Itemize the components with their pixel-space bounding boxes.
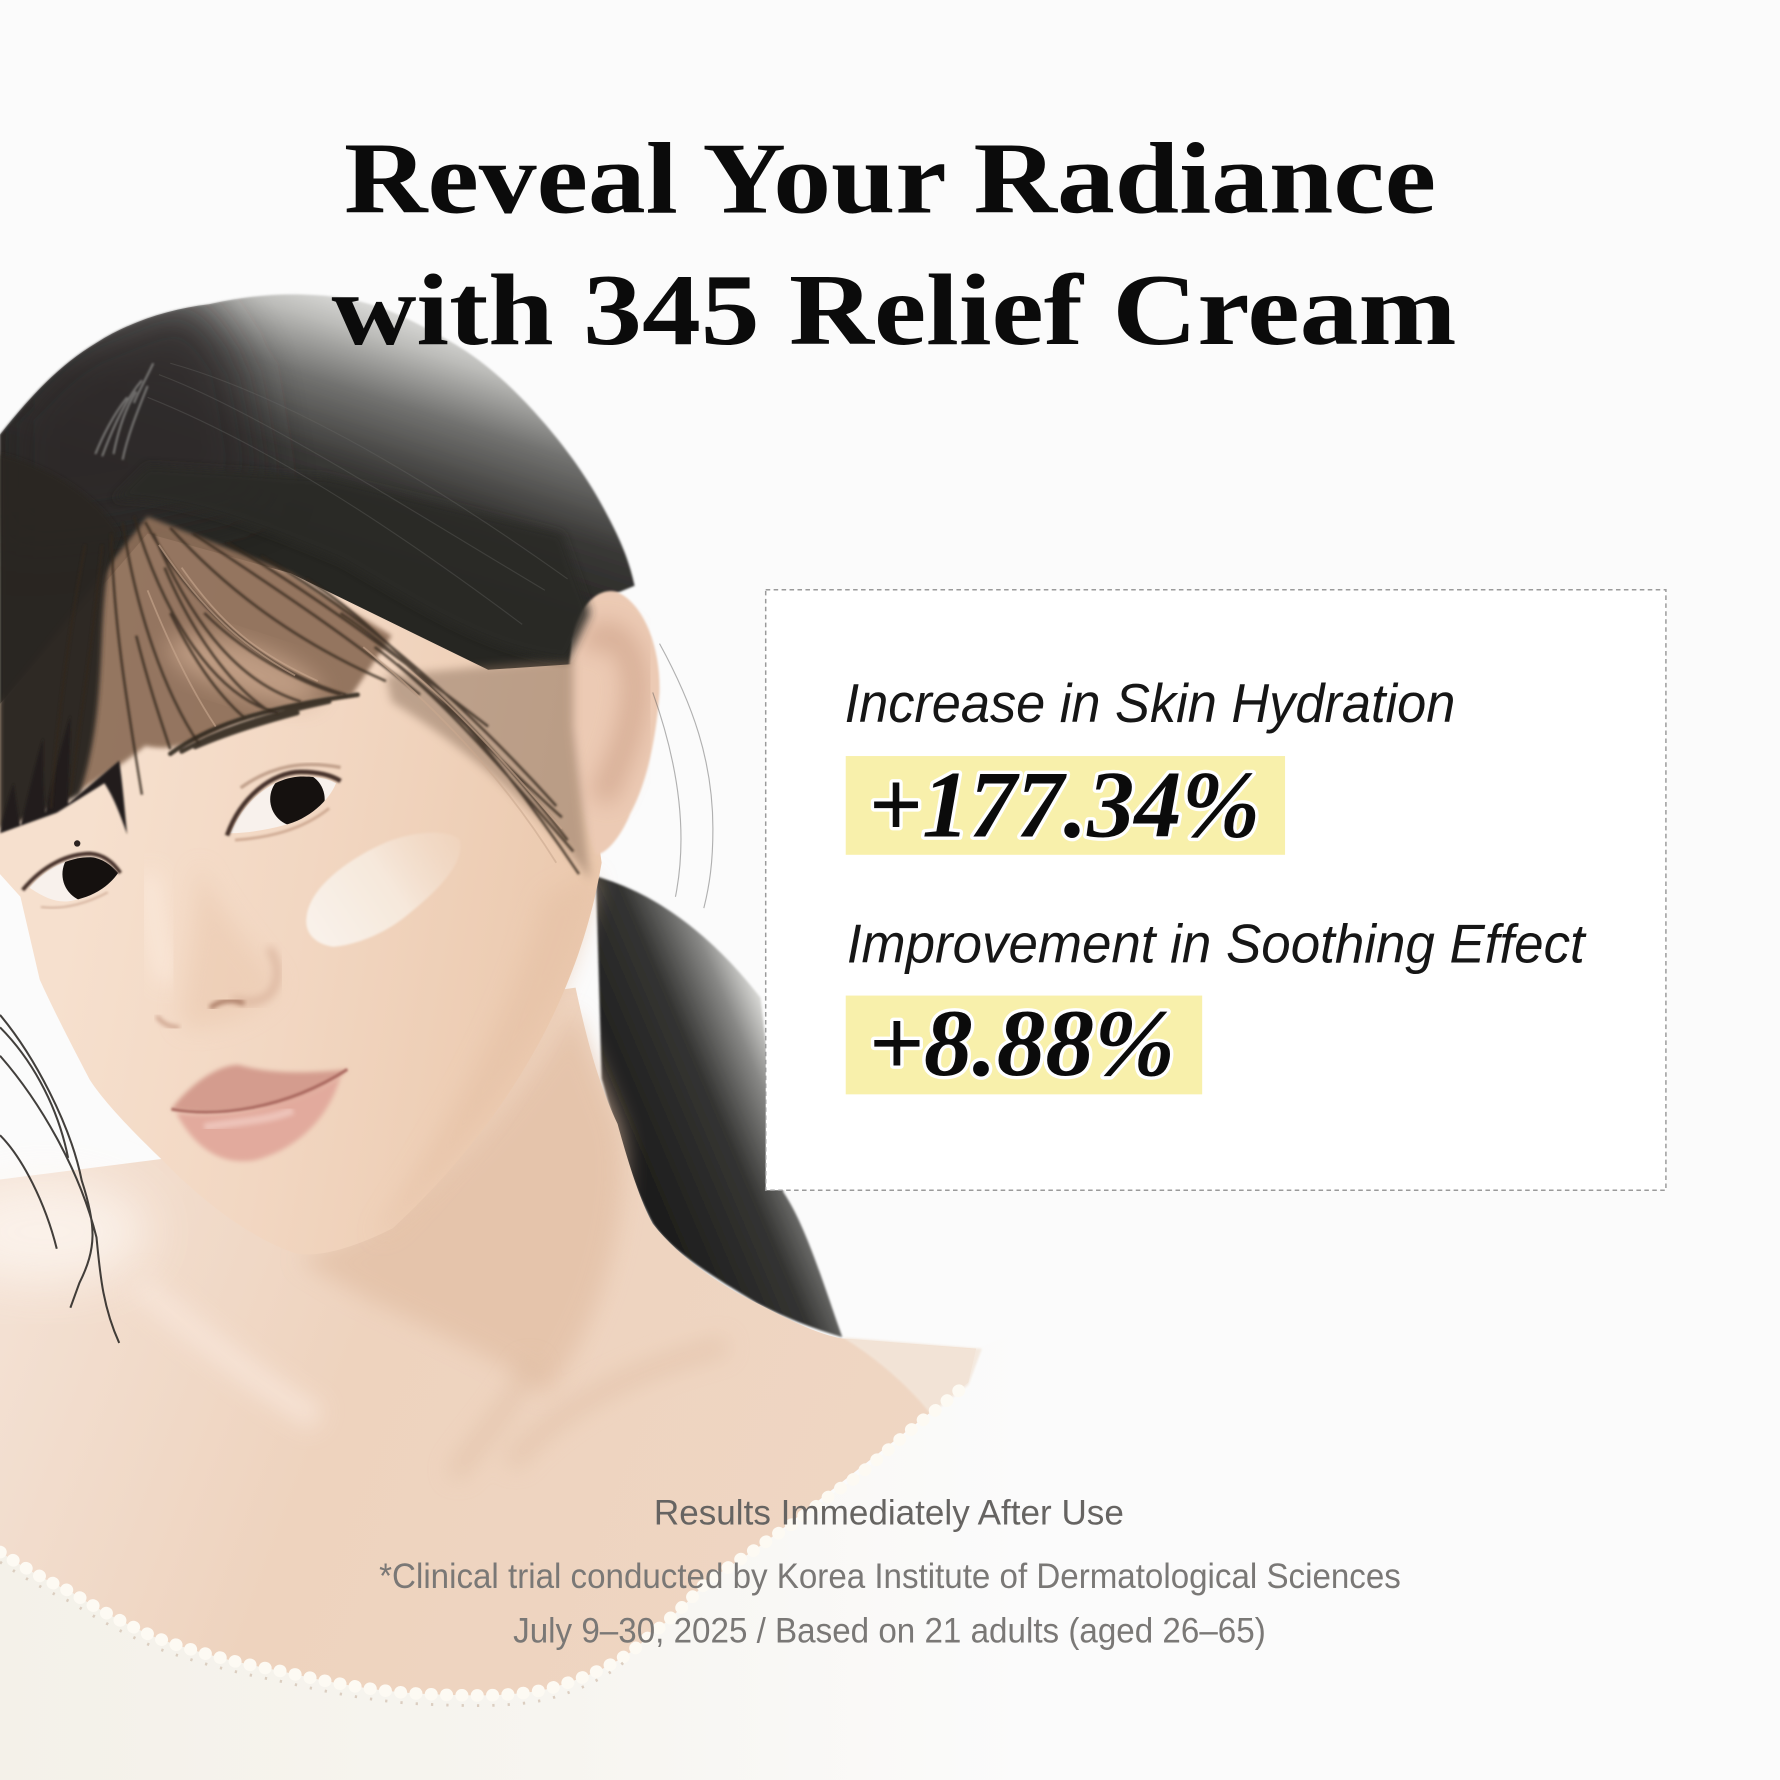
ponytail: [596, 876, 842, 1337]
highlight value: +8.88%: +8.88%: [868, 990, 1175, 1096]
inner ear shading: [588, 635, 636, 800]
crown part whorl: [95, 363, 153, 460]
portrait photo illustration: [0, 294, 982, 1780]
panel: clinical results: [766, 590, 1666, 1190]
scalloped neckline: [0, 1383, 968, 1695]
fringe side wisps: [386, 658, 590, 880]
label: skin hydration: Increase in Skin Hydration: [845, 673, 1455, 734]
back hair and crown: [0, 294, 635, 863]
flyaway strands right: [653, 644, 713, 908]
loose hair strands: [0, 1015, 119, 1343]
lips: [171, 1065, 347, 1161]
footnote text: July 9–30, 2025 / Based on 21 adults (aged 26–65): [513, 1612, 1266, 1651]
title: Reveal Your Radiance: [344, 122, 1436, 235]
collarbone highlight: [136, 1283, 318, 1419]
light fine strands: [148, 545, 562, 863]
dark fine strands: [51, 517, 579, 874]
white top garment: [0, 1283, 1135, 1780]
shoulder light patch: [0, 1181, 148, 1283]
fringe edge strands: [170, 695, 358, 754]
face: [0, 534, 602, 1254]
neck tones: [297, 1010, 623, 1396]
footnote text: Results Immediately After Use: [654, 1494, 1124, 1533]
title: [331, 122, 1456, 367]
eye left: [23, 846, 120, 908]
mole: [74, 840, 80, 847]
crown dark left side: [0, 289, 267, 545]
title: with 345 Relief Cream: [331, 254, 1456, 367]
label: soothing effect: Improvement in Soothing Effect: [847, 914, 1588, 975]
footnote text: [379, 1494, 1401, 1651]
neckline scallop dots: [0, 1562, 624, 1706]
eye right: [227, 764, 341, 840]
jaw shading: [375, 874, 596, 1237]
hair sheen strands: [148, 363, 568, 624]
shoulder garment strap: [842, 1337, 982, 1414]
cream swatch: [306, 833, 460, 947]
highlight value: +177.34%: +177.34%: [868, 752, 1260, 858]
panel box: [766, 590, 1666, 1190]
clavicle shadow: [454, 1345, 727, 1476]
footnote text: *Clinical trial conducted by Korea Institute of Dermatological Sciences: [379, 1557, 1401, 1596]
chest and shoulders: [0, 988, 976, 1708]
bangs: [0, 454, 590, 880]
translucent fringe: [0, 517, 392, 829]
fade to background right side: [931, 1243, 1430, 1777]
forehead glow: [161, 621, 327, 718]
left fringe chunk: [0, 454, 119, 829]
ear: [568, 591, 660, 855]
left fringe tips: [0, 715, 127, 834]
hair mass lower edge: [114, 465, 590, 661]
nose: [150, 863, 278, 1027]
